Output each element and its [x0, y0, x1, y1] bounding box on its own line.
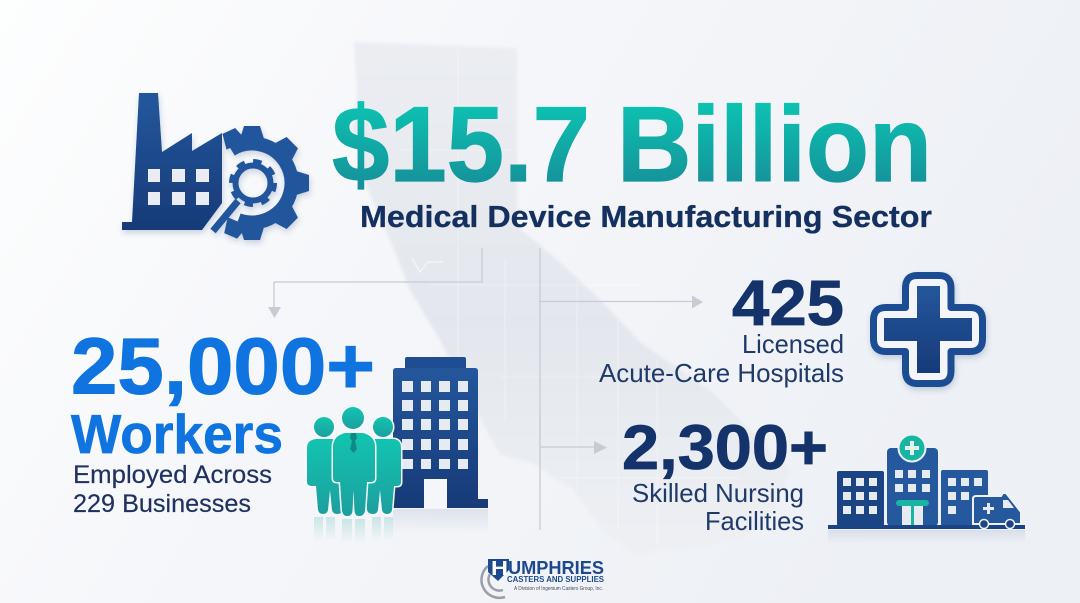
title	[332, 84, 932, 204]
stat: workers: 25,000+	[71, 322, 375, 410]
subtitle: Medical Device Manufacturing Sector	[360, 199, 932, 234]
title: Billion	[617, 84, 932, 204]
icon: factory and gear	[122, 93, 309, 241]
logo: Humphries Casters and Supplies: UMPHRIES	[508, 558, 604, 578]
stat: hospitals: Licensed	[742, 329, 844, 359]
connector arrow: to workers	[268, 248, 482, 318]
stat: hospitals: Acute-Care Hospitals	[599, 358, 844, 388]
connector arrow: to nursing facilities	[540, 441, 607, 454]
California map backdrop	[352, 42, 790, 556]
stat: nursing facilities: Facilities	[705, 506, 804, 536]
stat: workers	[71, 322, 375, 518]
stat: nursing facilities: 2,300+	[622, 413, 828, 483]
stat: workers: Employed Across	[73, 461, 272, 489]
logo: Humphries Casters and Supplies	[481, 558, 605, 598]
logo: Humphries Casters and Supplies: H	[491, 558, 508, 580]
stat: hospitals: 425	[732, 267, 844, 339]
logo: Humphries Casters and Supplies: A Division of Ingenium Casters Group, Inc.	[514, 586, 603, 592]
stat: workers: 229 Businesses	[73, 490, 251, 518]
title: $15.7	[332, 84, 590, 204]
icon: office building	[393, 357, 488, 533]
connector arrow: to hospitals	[540, 248, 703, 530]
icon: medical cross	[874, 276, 982, 384]
stat: workers: Workers	[71, 403, 283, 465]
stat: hospitals	[599, 267, 844, 388]
icon: group of workers	[307, 407, 401, 543]
stat: nursing facilities	[622, 413, 828, 536]
icon: hospital with ambulance	[828, 434, 1025, 544]
logo: Humphries Casters and Supplies: CASTERS AND SUPPLIES	[507, 575, 605, 584]
stat: nursing facilities: Skilled Nursing	[632, 478, 804, 508]
